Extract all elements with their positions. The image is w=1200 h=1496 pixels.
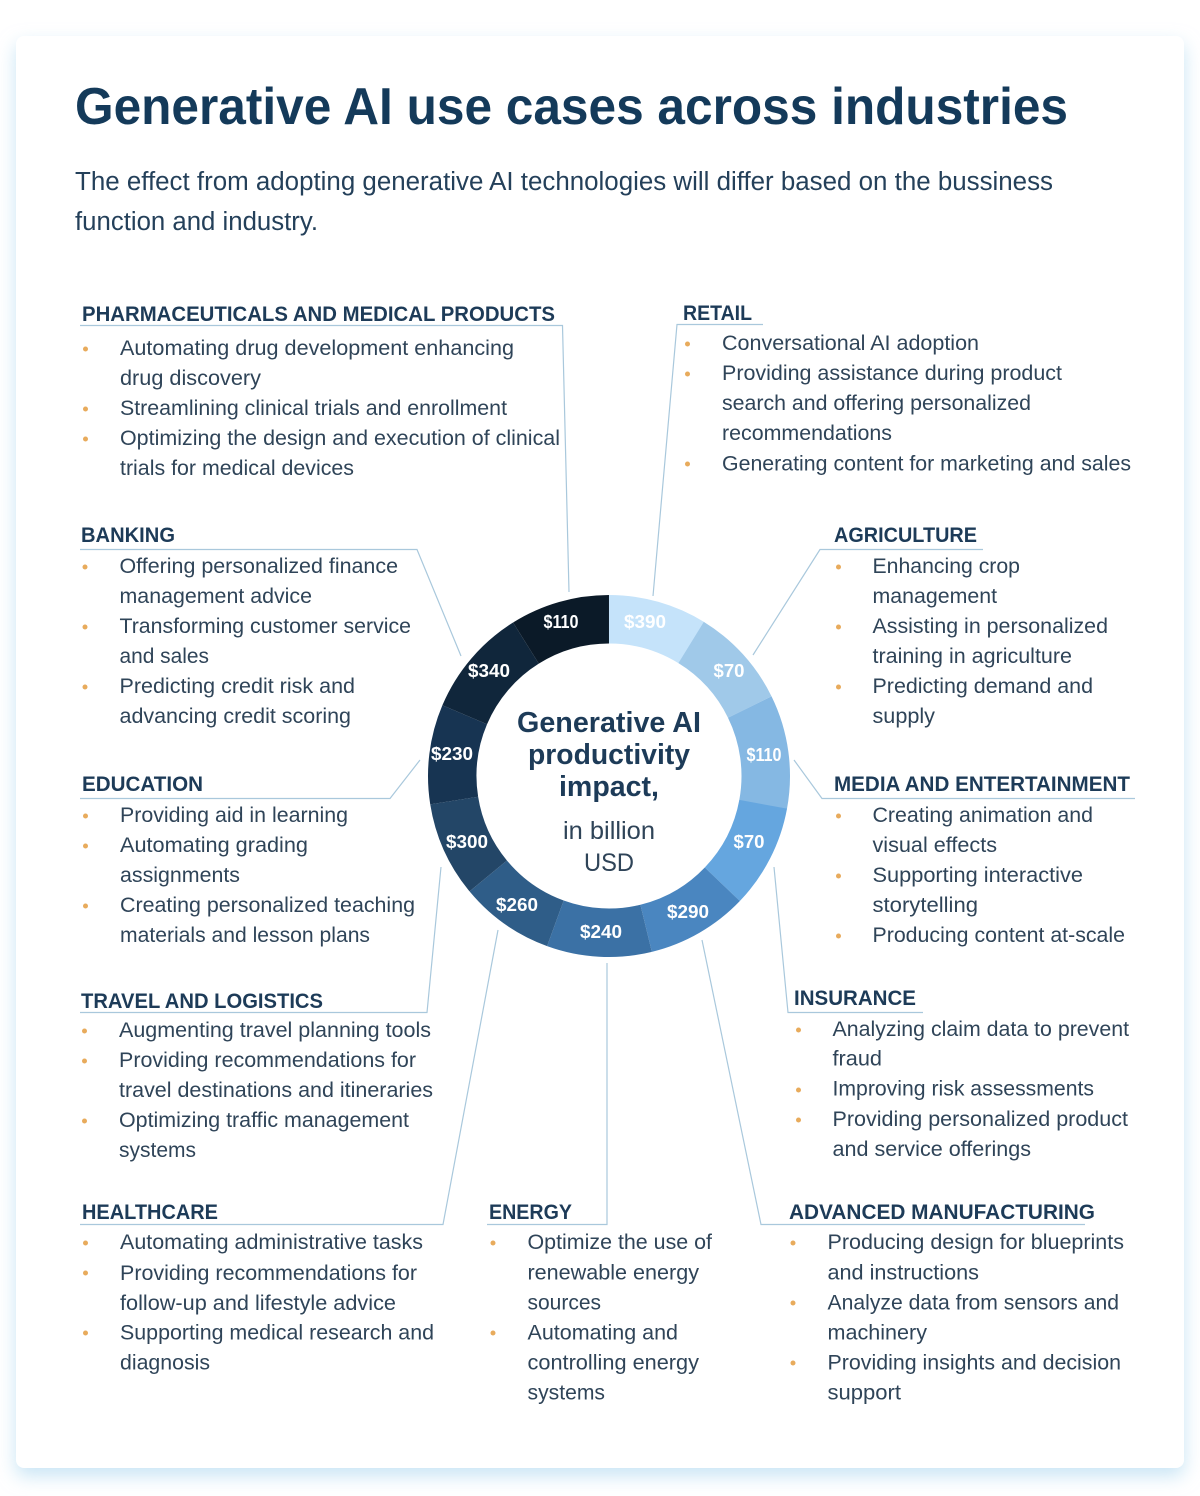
panel: media and entertainment: visual effects bbox=[872, 833, 997, 857]
donut chart: productivity impact: $70 bbox=[734, 831, 764, 852]
panel: travel and logistics: Optimizing traffic management bbox=[119, 1108, 409, 1132]
donut center label: in billion bbox=[563, 817, 655, 845]
panel: banking bbox=[80, 523, 461, 728]
panel: travel and logistics: Providing recommendations for bbox=[119, 1048, 416, 1072]
panel: travel and logistics: TRAVEL AND LOGISTICS bbox=[81, 989, 323, 1013]
donut chart: productivity impact: $230 bbox=[431, 743, 473, 764]
panel: insurance: fraud bbox=[832, 1046, 882, 1070]
panel: travel and logistics: travel destinations and itineraries bbox=[119, 1078, 433, 1102]
panel: media and entertainment: storytelling bbox=[872, 893, 978, 917]
panel: pharmaceuticals: Optimizing the design and execution of clinical bbox=[120, 426, 560, 450]
panel: education: Creating personalized teaching bbox=[120, 893, 415, 917]
panel: pharmaceuticals: PHARMACEUTICALS AND MEDICAL PRODUCTS bbox=[82, 302, 555, 326]
panel: education: Providing aid in learning bbox=[120, 803, 348, 827]
panel: banking: BANKING bbox=[81, 523, 175, 547]
panel: banking: management advice bbox=[120, 584, 312, 608]
donut center label: productivity bbox=[528, 739, 690, 771]
panel: agriculture: AGRICULTURE bbox=[834, 523, 977, 547]
donut chart: productivity impact: $300 bbox=[446, 831, 488, 852]
donut chart: productivity impact: $340 bbox=[468, 660, 510, 681]
panel: energy: controlling energy bbox=[528, 1350, 699, 1374]
panel: advanced manufacturing: machinery bbox=[828, 1320, 927, 1344]
panel: retail: Generating content for marketing and sales bbox=[722, 452, 1131, 476]
donut chart: productivity impact: $110 bbox=[544, 611, 578, 632]
panel: media and entertainment: Creating animation and bbox=[872, 803, 1093, 827]
panel: travel and logistics: Augmenting travel planning tools bbox=[119, 1018, 431, 1042]
panel: insurance: Analyzing claim data to prevent bbox=[832, 1017, 1129, 1041]
panel: retail: search and offering personalized bbox=[722, 391, 1031, 415]
subtitle bbox=[75, 168, 1053, 236]
panel: agriculture: Assisting in personalized bbox=[872, 614, 1108, 638]
panel: retail bbox=[653, 301, 1131, 596]
panel: banking: Predicting credit risk and bbox=[120, 674, 355, 698]
panel: advanced manufacturing bbox=[702, 940, 1124, 1404]
panel: energy: systems bbox=[528, 1380, 605, 1404]
panel: education: EDUCATION bbox=[82, 772, 203, 796]
donut chart: productivity impact: $240 bbox=[580, 921, 622, 942]
panel: agriculture: Predicting demand and bbox=[872, 674, 1093, 698]
title: Generative AI use cases across industries bbox=[75, 78, 1068, 136]
panel: travel and logistics bbox=[80, 867, 441, 1162]
panel: advanced manufacturing: and instructions bbox=[828, 1260, 979, 1284]
panel: insurance: Improving risk assessments bbox=[832, 1076, 1094, 1100]
panel: healthcare: follow-up and lifestyle advice bbox=[120, 1291, 396, 1315]
panel: advanced manufacturing: ADVANCED MANUFACTURING bbox=[789, 1200, 1095, 1224]
panel: banking: advancing credit scoring bbox=[120, 704, 351, 728]
subtitle: The effect from adopting generative AI technologies will differ based on the bussiness bbox=[75, 168, 1053, 196]
donut center label: Generative AI bbox=[517, 707, 701, 739]
panel: energy: ENERGY bbox=[489, 1200, 572, 1224]
panel: agriculture: management bbox=[872, 584, 997, 608]
donut chart: productivity impact: $390 bbox=[624, 611, 666, 632]
subtitle: function and industry. bbox=[75, 208, 318, 236]
donut center label: USD bbox=[584, 849, 634, 877]
panel: insurance: INSURANCE bbox=[794, 986, 916, 1010]
panel: healthcare bbox=[80, 930, 498, 1374]
panel: pharmaceuticals: Streamlining clinical trials and enrollment bbox=[120, 396, 507, 420]
panel: retail: Conversational AI adoption bbox=[722, 331, 979, 355]
donut chart: productivity impact bbox=[387, 554, 831, 998]
donut chart: productivity impact: $70 bbox=[714, 660, 744, 681]
panel: advanced manufacturing: Providing insights and decision bbox=[828, 1350, 1121, 1374]
panel: education: materials and lesson plans bbox=[120, 923, 370, 947]
donut chart: productivity impact: $290 bbox=[667, 901, 709, 922]
panel: healthcare: Automating administrative tasks bbox=[120, 1230, 423, 1254]
panel: insurance: and service offerings bbox=[832, 1137, 1031, 1161]
donut center label: impact, bbox=[559, 771, 659, 803]
panel: energy: renewable energy bbox=[528, 1260, 699, 1284]
panel: energy: sources bbox=[528, 1290, 601, 1314]
panel: banking: Offering personalized finance bbox=[120, 554, 398, 578]
panel: banking: and sales bbox=[120, 644, 209, 668]
panel: travel and logistics: systems bbox=[119, 1138, 196, 1162]
panel: education: assignments bbox=[120, 863, 240, 887]
panel: energy: Optimize the use of bbox=[528, 1230, 712, 1254]
panel: education: Automating grading bbox=[120, 833, 308, 857]
panel: advanced manufacturing: support bbox=[828, 1380, 901, 1404]
donut center label bbox=[517, 707, 701, 877]
panel: pharmaceuticals: Automating drug development enhancing bbox=[120, 336, 514, 360]
panel: insurance bbox=[774, 867, 1129, 1161]
panel: insurance: Providing personalized product bbox=[832, 1107, 1128, 1131]
panel: media and entertainment: Producing content at-scale bbox=[872, 923, 1125, 947]
panel: agriculture: Enhancing crop bbox=[872, 554, 1020, 578]
panel: healthcare: HEALTHCARE bbox=[82, 1200, 218, 1224]
donut chart: productivity impact: $110 bbox=[746, 744, 782, 765]
panel: banking: Transforming customer service bbox=[120, 614, 411, 638]
panel: media and entertainment: Supporting interactive bbox=[872, 863, 1083, 887]
panel: agriculture: training in agriculture bbox=[872, 644, 1072, 668]
donut chart: productivity impact: $260 bbox=[496, 894, 538, 915]
panel: energy bbox=[487, 963, 712, 1404]
panel: education bbox=[80, 760, 420, 947]
panel: energy: Automating and bbox=[528, 1320, 678, 1344]
panel: agriculture bbox=[753, 523, 1108, 728]
panel: media and entertainment bbox=[794, 760, 1135, 947]
panel: pharmaceuticals: drug discovery bbox=[120, 366, 261, 390]
panel: retail: RETAIL bbox=[683, 301, 752, 325]
panel: pharmaceuticals: trials for medical devices bbox=[120, 456, 354, 480]
panel: media and entertainment: MEDIA AND ENTERTAINMENT bbox=[834, 772, 1130, 796]
panel: retail: recommendations bbox=[722, 421, 892, 445]
panel: pharmaceuticals bbox=[80, 302, 569, 592]
panel: agriculture: supply bbox=[872, 704, 935, 728]
panel: healthcare: diagnosis bbox=[120, 1350, 210, 1374]
panel: retail: Providing assistance during product bbox=[722, 361, 1062, 385]
panel: advanced manufacturing: Analyze data from sensors and bbox=[828, 1290, 1119, 1314]
panel: healthcare: Providing recommendations for bbox=[120, 1261, 417, 1285]
panel: healthcare: Supporting medical research and bbox=[120, 1320, 434, 1344]
panel: advanced manufacturing: Producing design for blueprints bbox=[828, 1230, 1124, 1254]
